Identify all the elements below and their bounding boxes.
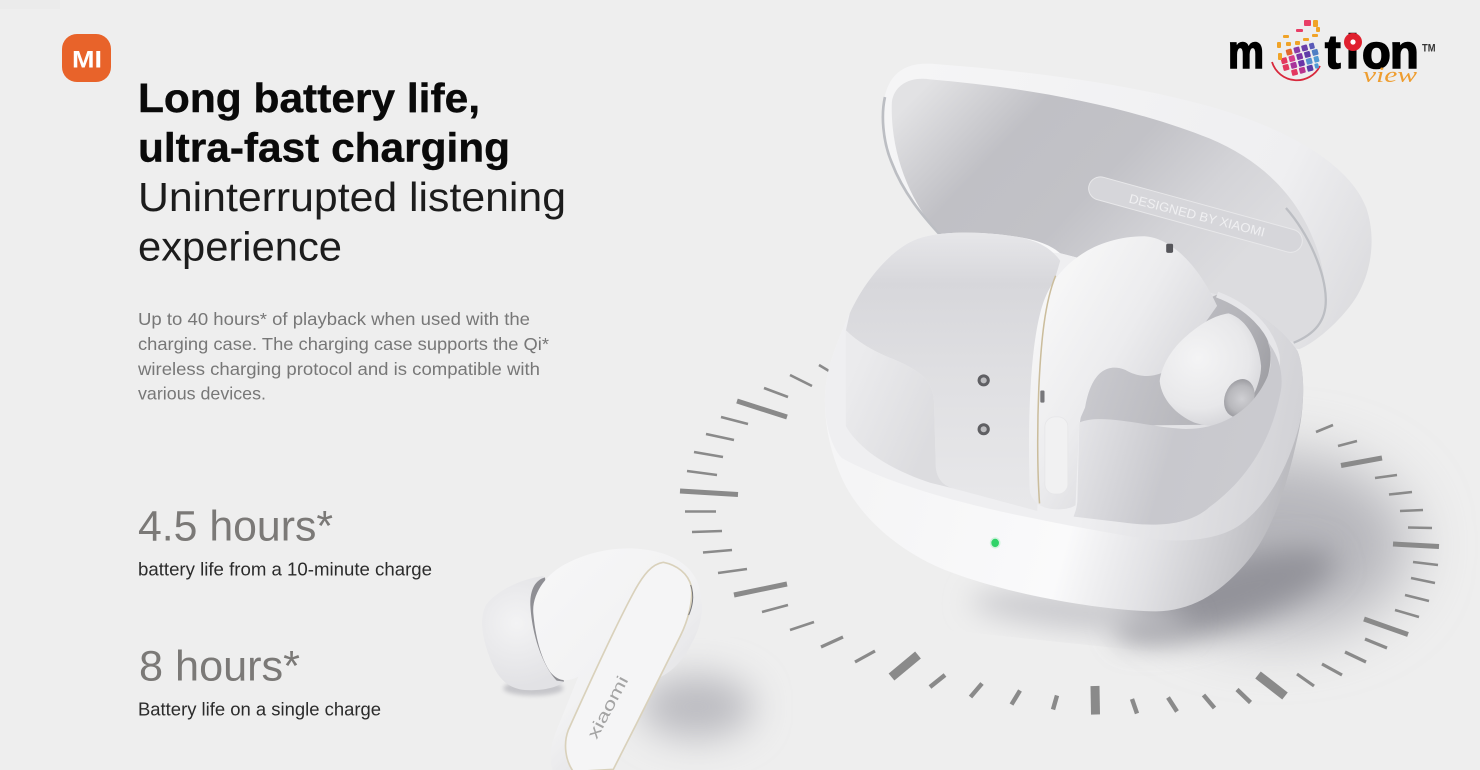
case base shell [825,233,1303,611]
title [138,75,566,270]
case back wall and center panel [846,233,1060,511]
charging case with earbud [825,64,1372,611]
description paragraph: charging case. The charging case supports the Qi* [138,334,549,354]
lid nameplate: designed by Xiaomi: DESIGNED BY XIAOMI [1128,191,1267,240]
ear tip [482,576,564,690]
case left pillar [846,330,953,488]
logo: Xiaomi MI badge [62,34,111,82]
stat: 8 hours: 8 hours* [139,642,300,690]
logo: motion view [1228,20,1436,87]
logo i dot [1344,33,1362,51]
title: Long battery life, [138,75,480,121]
loose earbud [482,548,753,770]
stat: 8 hours [138,642,381,720]
logo: Xiaomi MI badge: MI [72,46,102,74]
title: experience [138,224,342,270]
title: Uninterrupted listening [138,174,566,220]
charging pins [978,374,990,435]
logo wordmark: tion [1325,25,1419,78]
description paragraph: Up to 40 hours* of playback when used with the [138,309,530,329]
status LED [990,537,1001,549]
case cast shadow [969,455,1410,661]
stat: 4.5 hours [138,502,432,580]
earbud in case [1029,236,1217,509]
ear tip [1160,313,1261,426]
description paragraph [137,309,549,404]
stat: 8 hours: Battery life on a single charge [138,698,381,720]
stat: 4.5 hours: 4.5 hours* [138,502,333,550]
logo wordmark [1228,25,1419,78]
case front wall [1074,342,1282,525]
description paragraph: various devices. [138,384,266,404]
earbud cavity [1079,295,1271,426]
logo trademark: TM [1422,42,1436,54]
xiaomi wordmark: xiaomi [583,673,632,742]
description paragraph: wireless charging protocol and is compatible with [137,359,540,379]
logo wordmark: m [1228,25,1264,78]
clock dial tick marks [680,365,1439,714]
case lid [882,64,1372,349]
earbud shadow [503,675,753,738]
title: ultra-fast charging [138,124,510,170]
case upper rim [825,240,1303,540]
lid nameplate: designed by Xiaomi [1100,188,1291,241]
stat: 4.5 hours: battery life from a 10-minute charge [138,558,432,580]
logo globe [1272,20,1322,80]
logo view script: view [1363,62,1417,87]
earbud body [533,548,702,770]
